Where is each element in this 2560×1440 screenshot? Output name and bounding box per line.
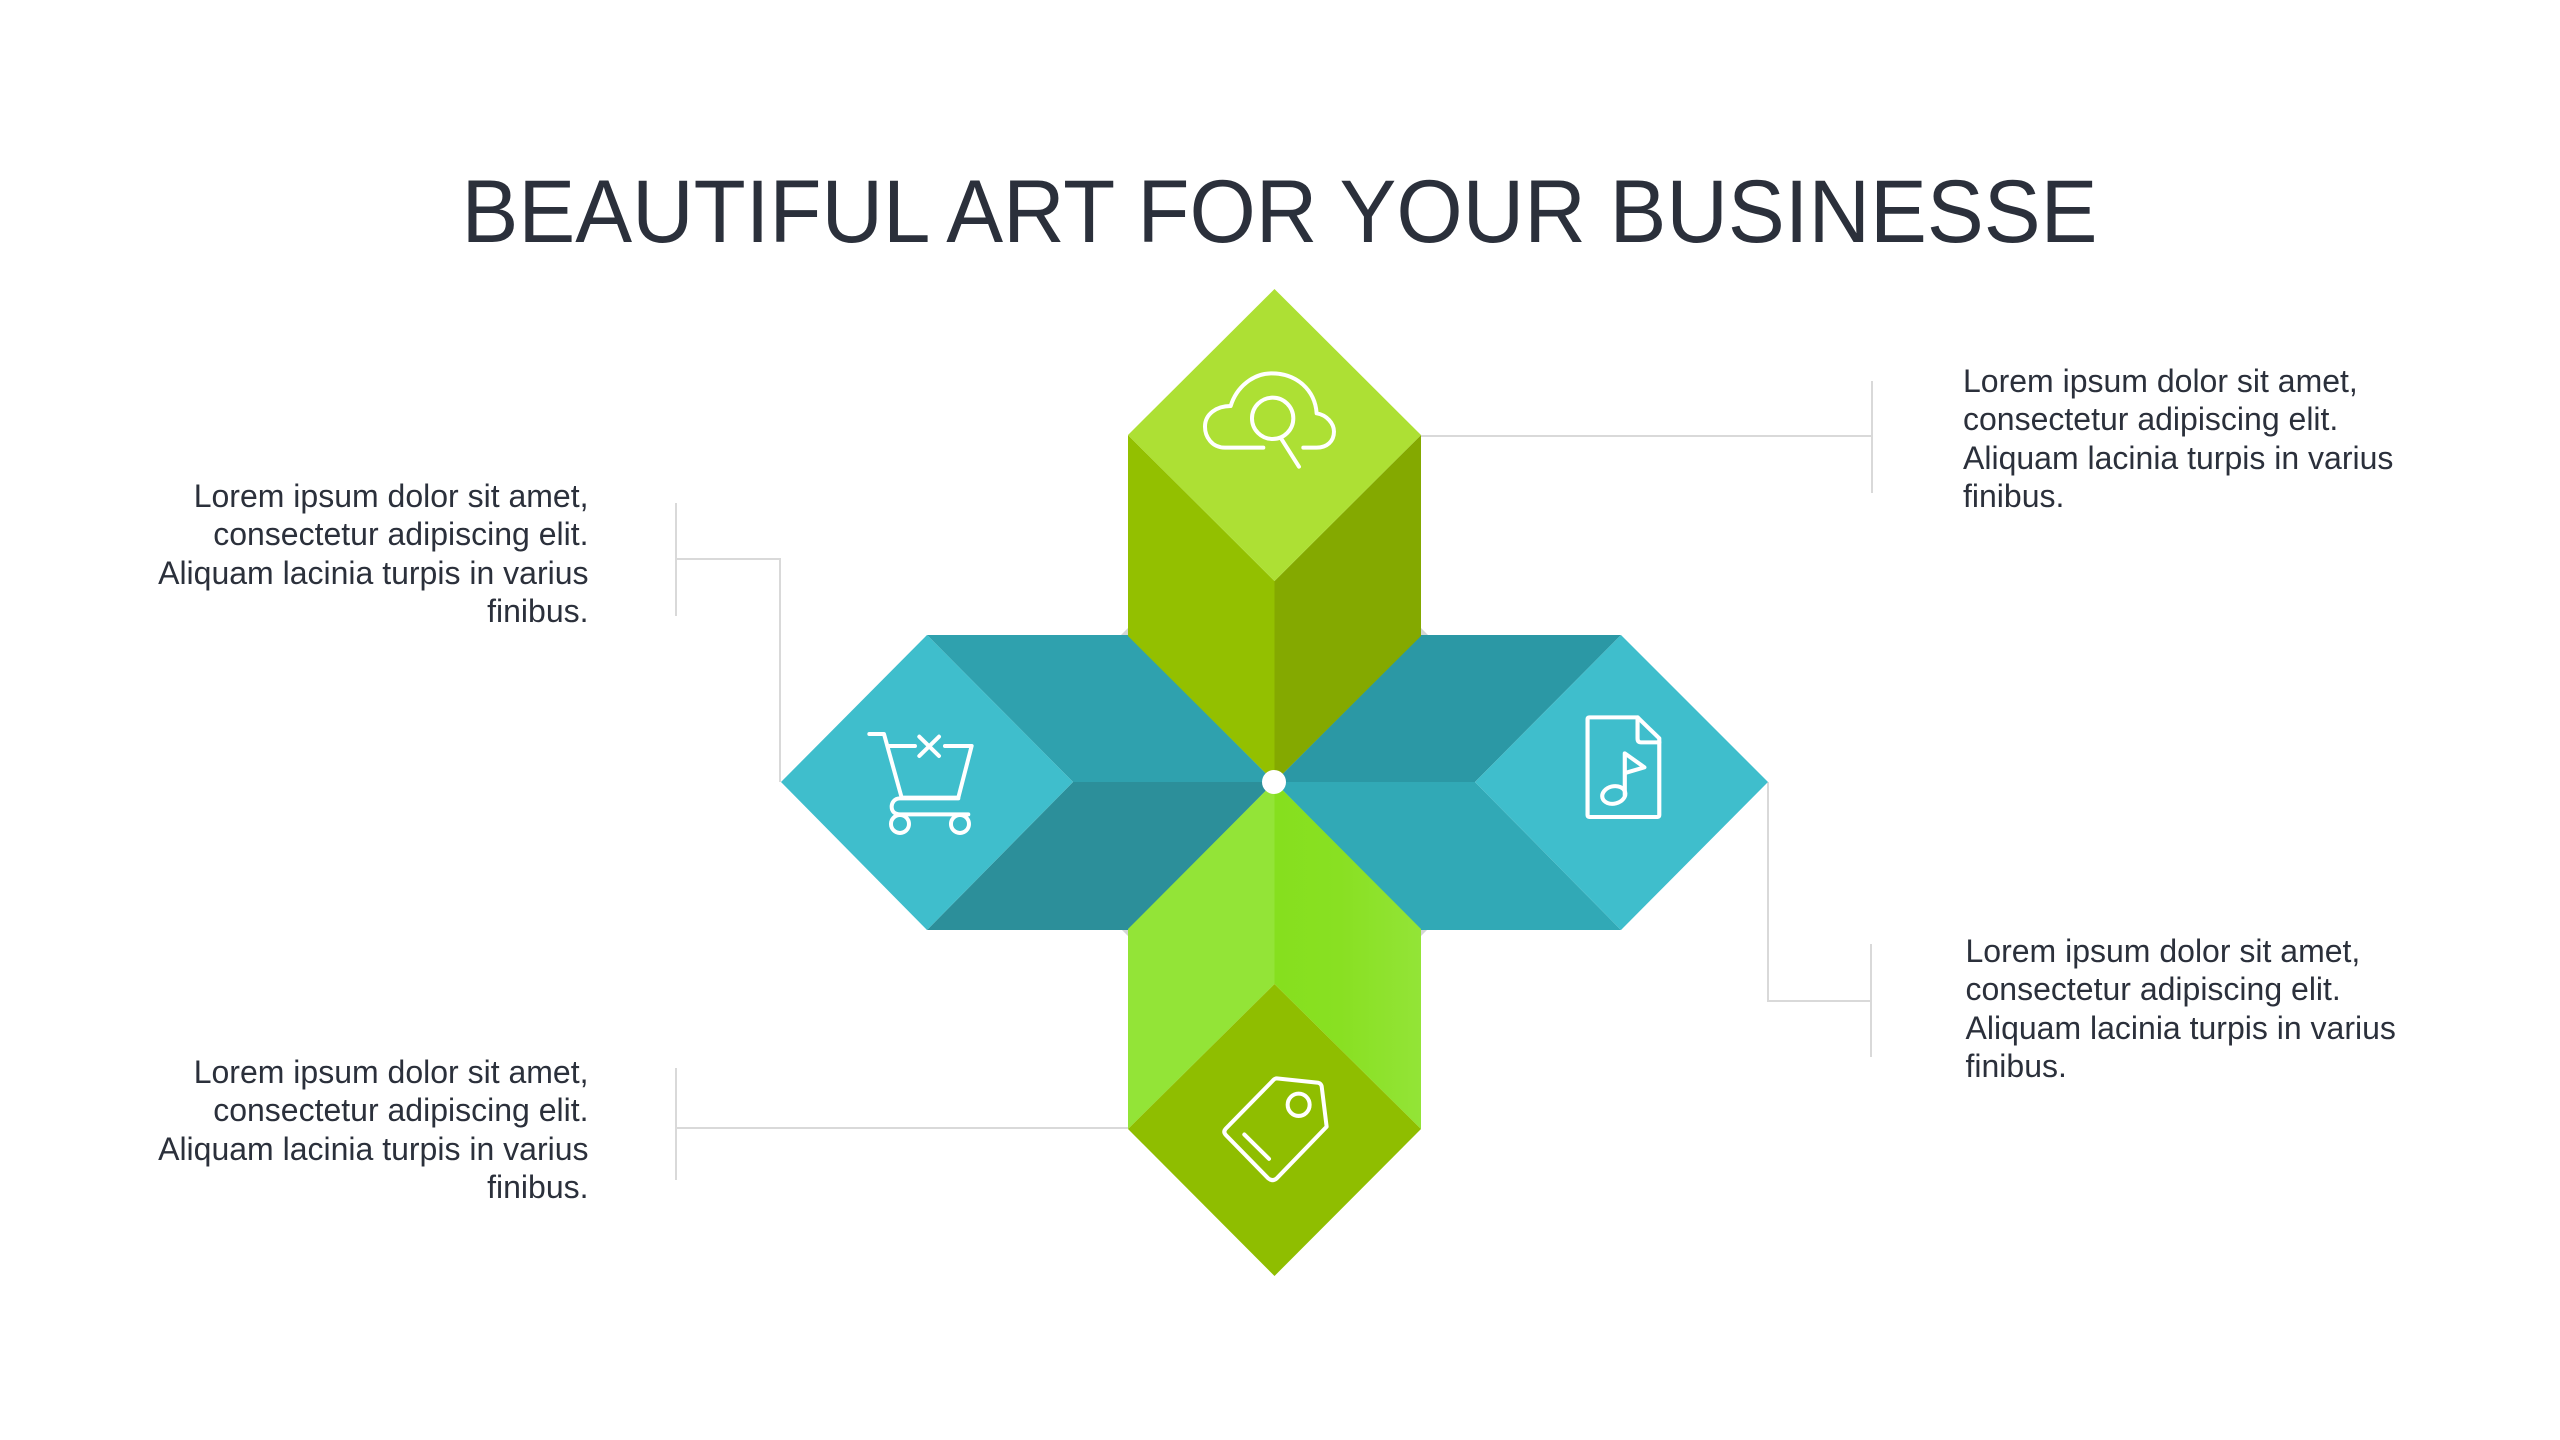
icon: shopping cart with x (869, 734, 972, 833)
top diamond (1128, 289, 1421, 581)
connector: bottom right (1768, 782, 1871, 1057)
connector: top left (676, 503, 780, 782)
right upper face (1274, 635, 1621, 782)
text block: top right: Lorem ipsum dolor sit amet, (1963, 363, 2358, 399)
text block: top left: Lorem ipsum dolor sit amet, (194, 478, 588, 514)
connector: bottom left (676, 1068, 1128, 1180)
text block: bottom right: consectetur adipiscing elit. (1966, 971, 2341, 1007)
text block: bottom left: Aliquam lacinia turpis in varius (158, 1131, 588, 1167)
shadow corners (1121, 628, 1428, 936)
text block: top left: finibus. (487, 593, 588, 629)
top left face (1128, 435, 1274, 782)
text block: top right: finibus. (1963, 478, 2064, 514)
block: right teal (1274, 635, 1768, 930)
center dot (1262, 770, 1286, 794)
icon: music file (1588, 717, 1659, 817)
block: left teal (781, 635, 1274, 930)
left diamond (781, 635, 1073, 930)
bottom right face (1274, 782, 1421, 1129)
block: top green (1128, 289, 1421, 782)
title: BEAUTIFUL ART FOR YOUR BUSINESSE (462, 161, 2098, 261)
text block: top right: Aliquam lacinia turpis in varius (1963, 440, 2393, 476)
text block: bottom right: Aliquam lacinia turpis in varius (1966, 1010, 2396, 1046)
text block: top left: consectetur adipiscing elit. (213, 516, 588, 552)
text block: top left: Aliquam lacinia turpis in varius (158, 555, 588, 591)
top right face (1274, 435, 1421, 782)
icon: cloud search (1205, 373, 1334, 467)
left lower face (927, 782, 1274, 930)
icon: price tag (1224, 1078, 1327, 1180)
bottom left face (1128, 782, 1274, 1129)
text block: bottom left: Lorem ipsum dolor sit amet, (194, 1054, 588, 1090)
text block: top right: consectetur adipiscing elit. (1963, 401, 2338, 437)
text block: bottom left: consectetur adipiscing elit. (213, 1092, 588, 1128)
block: bottom green (1128, 782, 1421, 1276)
bottom diamond (1128, 984, 1421, 1276)
connector: top right (1421, 381, 1872, 493)
right diamond (1475, 635, 1768, 930)
text block: bottom right: Lorem ipsum dolor sit amet, (1966, 933, 2360, 969)
right lower face (1274, 782, 1621, 930)
text block: bottom left: finibus. (487, 1169, 588, 1205)
text block: bottom right: finibus. (1966, 1048, 2067, 1084)
left upper face (927, 635, 1274, 782)
